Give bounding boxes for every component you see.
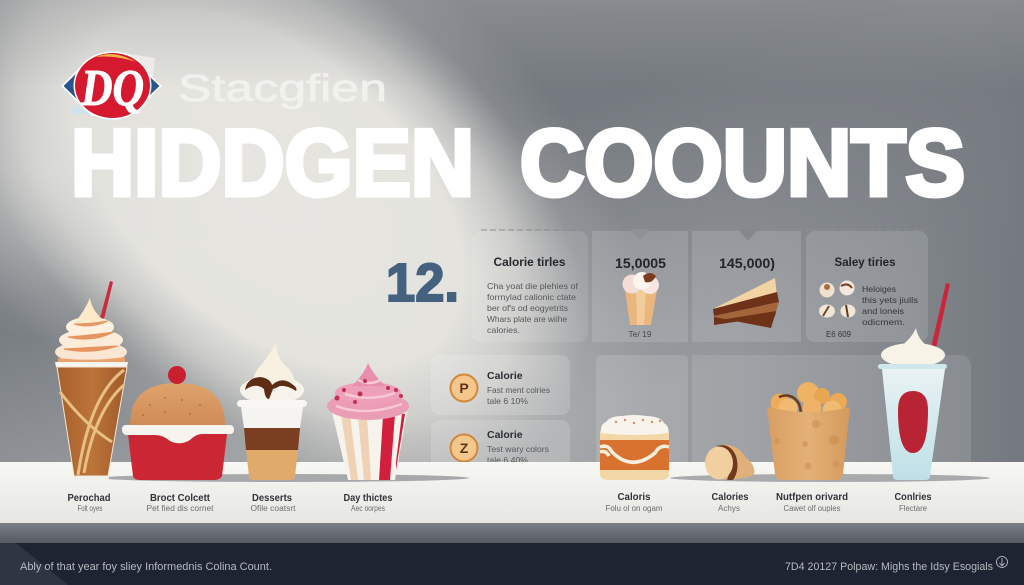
label: Calories [712,492,749,513]
lower background panels [431,355,971,470]
label: Perochad: Perochad [68,493,110,504]
callout: calorie 2: Test wary colors [487,444,549,454]
subtitle brand text: Stacgfien [178,68,387,110]
text: salty tiers note: and loneis [862,306,904,316]
callout: calorie 1: tale 6 10% [487,396,528,406]
icon: nut clusters [819,280,856,318]
label: Perochad [68,493,110,513]
label: Caloris: Caloris [618,492,651,503]
caption: Te/ 19: Te/ 19 [628,329,652,339]
text: salty tiers note [862,284,918,327]
logo: DQ [61,52,162,120]
label: Nutfpen orivard: Nutfpen orivard [776,492,848,503]
callout: calorie 1 [450,370,550,406]
label: Calories: Calories [712,492,749,503]
callout: calorie 2: Z [460,440,469,456]
label: Perochad: Folt oyes [78,504,102,513]
text: calorie tiers: calories. [487,325,520,335]
icon: ice cream cup [622,272,659,325]
stat: 15,0005: 15,0005 [615,255,666,271]
callout: calorie 1: Calorie [487,370,523,382]
dessert: sundae cup [237,343,307,480]
text: salty tiers note: this yets jiulls [862,295,918,305]
text: calorie tiers: Cha yoat die plehies of [487,281,579,291]
dessert: layered cone shake [55,281,128,480]
label: Caloris: Folu ol on ogam [606,504,663,513]
label: Contries: Conlries [894,492,932,503]
dessert: bun in red bowl [122,366,234,480]
label: Broct Colcett [146,493,214,513]
caption: 66 609: E6 609 [826,329,851,339]
dessert: orange frosted cake [600,415,669,480]
text: calorie tiers: Calorie tirles [494,255,566,269]
label: Desserts: Ofile coatsrt [250,504,296,513]
text: calorie tiers [487,255,579,335]
label: Day thictes: Aec oorpes [351,504,385,513]
big number: 12. [386,253,459,313]
label: Caloris [606,492,663,513]
footer [0,543,1024,585]
label: Desserts [250,493,296,513]
title [71,110,965,215]
callout: calorie 2: Calorie [487,429,523,441]
callout: calorie 1: P [459,380,469,396]
label: Day thictes: Day thictes [344,493,393,504]
label: Day thictes [344,493,393,513]
label: Nutfpen orivard: Cawet olf ouples [784,504,840,513]
labels under desserts [68,492,932,513]
icon: circled arrow [996,556,1008,568]
label: Calories: Achys [718,504,740,513]
stat: 145,000: 145,000) [719,255,775,271]
label: Broct Colcett: Pet fied dis cornet [146,504,214,513]
icon: layered cake slice [713,278,779,328]
dessert: bucket of dough balls [767,382,850,480]
panel: calorie tiers [472,229,928,342]
callout: calorie 1: Fast ment colries [487,385,550,395]
shelf [0,462,1024,523]
dessert: small pastry [705,445,754,480]
label: Nutfpen orivard [776,492,848,513]
shelf edge band [0,523,1024,543]
title: HIDDGEN [71,110,474,215]
logo: DQ: DQ [80,60,144,117]
dessert: tall shake with straw [878,283,950,480]
footer right text: 7D4 20127 Polpaw: Mighs the Idsy Esogials [785,561,993,573]
dessert: pink cupcake [327,363,409,480]
label: Broct Colcett: Broct Colcett [150,493,211,504]
text: salty tiers note: odicmem. [862,317,905,327]
label: Contries: Flectare [899,504,928,513]
label: Contries [894,492,932,513]
label: Desserts: Desserts [252,493,292,504]
text: salty tiers note: Heloiges [862,284,896,294]
callout: calorie 2: tale 6 40% [487,455,528,465]
text: calorie tiers: ber of's od eogyetrits [487,303,568,313]
footer left text: Ably of that year foy sliey Informednis Colina Count. [20,561,272,573]
title: COOUNTS [520,110,965,215]
callout: calorie 2 [450,429,549,465]
text: calorie tiers: Whars plate are wiihe [487,314,567,324]
heading: salty tiries: Saley tiries [834,255,896,269]
text: calorie tiers: forrnylad calionic ctate [487,292,576,302]
